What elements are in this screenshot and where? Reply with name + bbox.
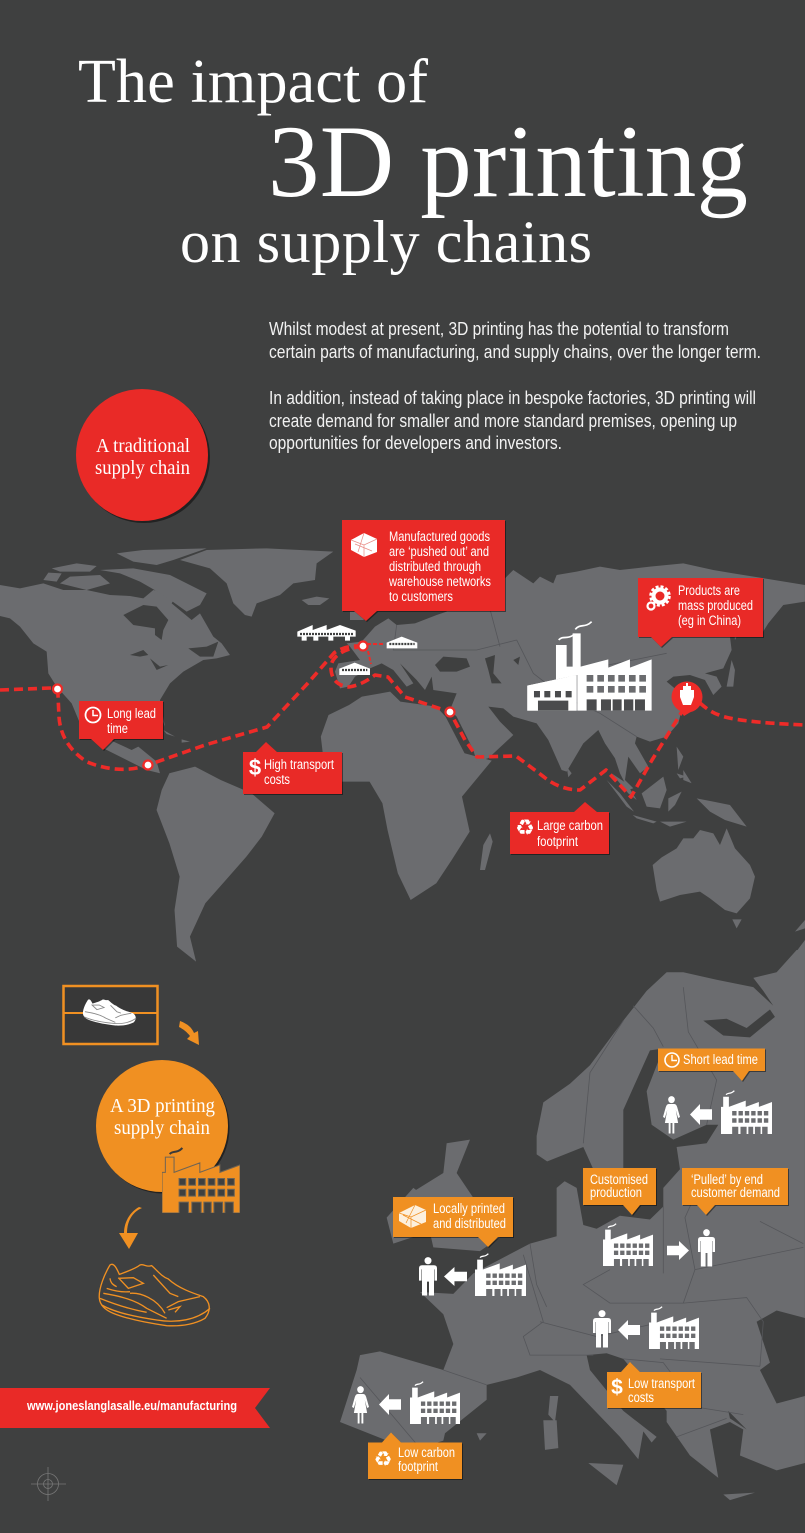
- callout: large carbon footprint: ♻: [515, 816, 535, 841]
- ribbon: website: [0, 1388, 270, 1428]
- callout: manufactured goods: Manufactured goods: [389, 529, 490, 544]
- intro text: Whilst modest at present, 3D printing has the potential to transform: [269, 319, 729, 339]
- south america and africa: [157, 692, 492, 962]
- icon: gears: [648, 586, 670, 610]
- arrow: to orange shoe: [119, 1207, 142, 1249]
- cluster: low carbon footprint: ♻: [374, 1447, 392, 1471]
- callout: large carbon footprint: footprint: [537, 834, 578, 849]
- callout: high transport costs: High transport: [264, 757, 334, 772]
- printer frame with white shoe: [63, 986, 158, 1044]
- cluster: low carbon footprint: Low carbon: [398, 1445, 455, 1460]
- badge: traditional supply chain: [76, 389, 210, 523]
- world map: [0, 548, 805, 970]
- icon: box: [351, 533, 377, 557]
- badge: 3D printing supply chain: A 3D printing: [110, 1096, 215, 1117]
- title: The impact of: [78, 48, 428, 116]
- title: [78, 48, 748, 275]
- cluster: low transport costs: $: [611, 1376, 623, 1399]
- callout: manufactured goods: are ‘pushed out’ and: [389, 544, 489, 559]
- callout: mass produced: mass produced: [678, 598, 753, 613]
- large factory in Asia: [527, 622, 652, 711]
- eurasia: [335, 563, 805, 790]
- route markers: [53, 642, 454, 770]
- intro text: create demand for smaller and more standard premises, opening up: [269, 411, 737, 431]
- callout: long lead time: [79, 701, 163, 750]
- ship pin: [672, 682, 702, 716]
- icon: orange shoe: [99, 1264, 210, 1326]
- callout: mass produced: [638, 578, 763, 647]
- badge: 3D printing supply chain: supply chain: [114, 1118, 210, 1139]
- ribbon: website: www.joneslanglasalle.eu/manufacturing: [26, 1399, 237, 1413]
- cluster: low transport costs: Low transport: [628, 1376, 695, 1391]
- callout: manufactured goods: to customers: [389, 589, 453, 604]
- crosshair mark: [31, 1467, 66, 1501]
- callout: high transport costs: [243, 742, 342, 794]
- cluster: short lead time: [658, 1048, 772, 1134]
- callout: large carbon footprint: Large carbon: [537, 818, 603, 833]
- badge: 3D printing supply chain: [96, 1060, 230, 1194]
- australia and south east asia: [480, 773, 805, 970]
- callout: mass produced: (eg in China): [678, 613, 741, 628]
- callout: long lead time: Long lead: [107, 706, 156, 721]
- callout: long lead time: time: [107, 721, 128, 736]
- badge: traditional supply chain: supply chain: [95, 458, 190, 479]
- intro text: [269, 319, 761, 453]
- badge: traditional supply chain: A traditional: [96, 436, 191, 457]
- cluster: short lead time: Short lead time: [683, 1052, 758, 1067]
- icon: clock: [665, 1053, 679, 1067]
- title: on supply chains: [180, 209, 592, 275]
- icon: clock: [86, 708, 100, 722]
- cluster: locally printed and distributed: [393, 1197, 526, 1296]
- cluster: low carbon footprint: [352, 1382, 462, 1479]
- callout: high transport costs: costs: [264, 772, 290, 787]
- cluster: pulled by end customer demand: customer demand: [691, 1185, 780, 1200]
- route: dashed shipping line: [0, 644, 805, 797]
- cluster: low transport costs: costs: [628, 1390, 654, 1405]
- callout: manufactured goods: distributed through: [389, 559, 481, 574]
- icon: box: [399, 1205, 426, 1228]
- cluster: locally printed and distributed: and distributed: [433, 1216, 506, 1231]
- callout: manufactured goods: [342, 520, 505, 621]
- arrow: to circle: [179, 1021, 199, 1045]
- callout: large carbon footprint: [510, 802, 609, 854]
- title: 3D printing: [268, 105, 748, 219]
- cluster: customised production: production: [590, 1185, 642, 1200]
- callout: mass produced: Products are: [678, 583, 740, 598]
- warehouses in Europe: [297, 625, 417, 675]
- icon: white shoe: [83, 999, 136, 1026]
- callout: high transport costs: $: [249, 755, 261, 780]
- icon: orange factory: [162, 1148, 240, 1213]
- callout: manufactured goods: warehouse networks: [388, 574, 491, 589]
- cluster: pulled by end customer demand: ‘Pulled’ by end: [691, 1172, 763, 1187]
- cluster: customised production: Customised: [590, 1172, 648, 1187]
- cluster: low transport costs: [593, 1307, 701, 1408]
- cluster: low carbon footprint: footprint: [398, 1459, 438, 1474]
- cluster: customised production: [583, 1168, 656, 1266]
- europe map: [340, 950, 805, 1500]
- cluster: locally printed and distributed: Locally printed: [433, 1201, 505, 1216]
- north america and greenland: [0, 548, 333, 773]
- intro text: opportunities for developers and investors.: [269, 433, 562, 453]
- cluster: pulled by end customer demand: [667, 1168, 788, 1266]
